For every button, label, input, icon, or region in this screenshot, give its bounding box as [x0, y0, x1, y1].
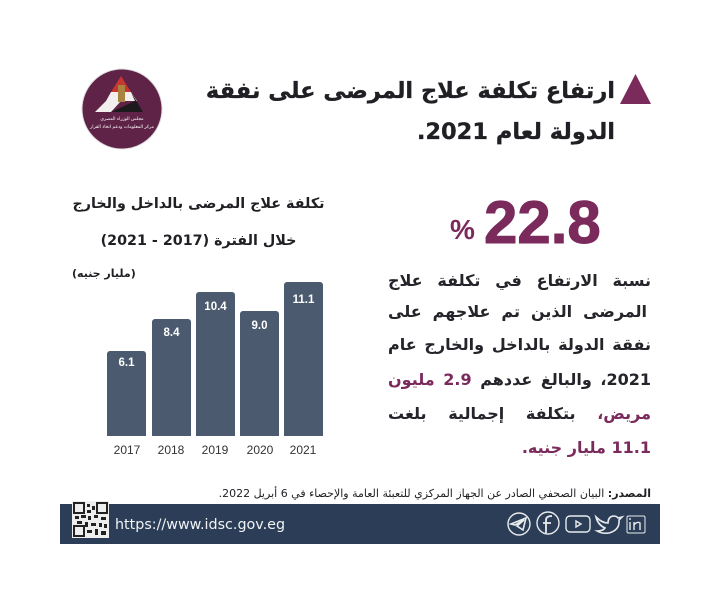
body text: 11.1 مليار جنيه. [522, 438, 651, 457]
chart title: تكلفة علاج المرضى بالداخل والخارج [72, 196, 325, 212]
body text [388, 271, 651, 457]
text: 2019 [202, 443, 228, 457]
year axis [114, 443, 316, 457]
icon: facebook [537, 512, 559, 534]
text: 2017 [114, 443, 140, 457]
body text: نسبة الارتفاع في تكلفة علاج [388, 271, 651, 290]
body text: 2021، والبالغ عددهم 2.9 مليون [388, 370, 651, 389]
bar 2018 [152, 319, 191, 436]
logo [82, 68, 162, 150]
logo: مجلس الوزراء المصري [100, 117, 144, 122]
chart title [72, 196, 325, 248]
body text: المرضى الذين تم علاجهم على [388, 302, 647, 321]
icon: title triangle [620, 74, 651, 104]
bar 2017 [107, 351, 146, 436]
text: 2020 [247, 443, 273, 457]
icon: linkedin [627, 516, 645, 533]
bar chart [107, 282, 323, 436]
icon: telegram [508, 513, 530, 535]
bar 2019 [196, 292, 235, 436]
bar 2020: 9.0 [252, 320, 268, 332]
text: 2018 [158, 443, 184, 457]
logo: مركز المعلومات ودعم اتخاذ القرار [89, 124, 155, 130]
website url: https://www.idsc.gov.eg [115, 517, 285, 533]
title: الدولة لعام 2021. [417, 119, 615, 145]
icon: QR code [72, 501, 109, 538]
title [206, 78, 615, 145]
big percent: % [450, 214, 475, 245]
footer bar [60, 504, 660, 544]
bar 2019: 10.4 [204, 301, 227, 313]
social icons [507, 511, 646, 536]
bar 2021: 11.1 [293, 294, 314, 306]
icon: youtube [566, 516, 590, 532]
text: 2021 [290, 443, 316, 457]
bar 2017: 6.1 [118, 357, 134, 369]
title: ارتفاع تكلفة علاج المرضى على نفقة [206, 78, 615, 104]
source note: المصدر: البيان الصحفي الصادر عن الجهاز المركزي للتعبئة العامة والإحصاء في 6 أبريل 2022. [219, 487, 651, 500]
big percent: 22.8 [484, 189, 601, 256]
icon: twitter [596, 516, 622, 533]
body text: نفقة الدولة بالداخل والخارج عام [388, 335, 651, 354]
chart unit: (مليار جنيه) [72, 267, 136, 280]
bar 2020 [240, 311, 279, 436]
body text: مريض، بتكلفة إجمالية بلغت [388, 404, 651, 423]
bar 2018: 8.4 [164, 327, 180, 339]
chart title: خلال الفترة (2017 - 2021) [101, 232, 296, 248]
bar 2021 [284, 282, 323, 436]
